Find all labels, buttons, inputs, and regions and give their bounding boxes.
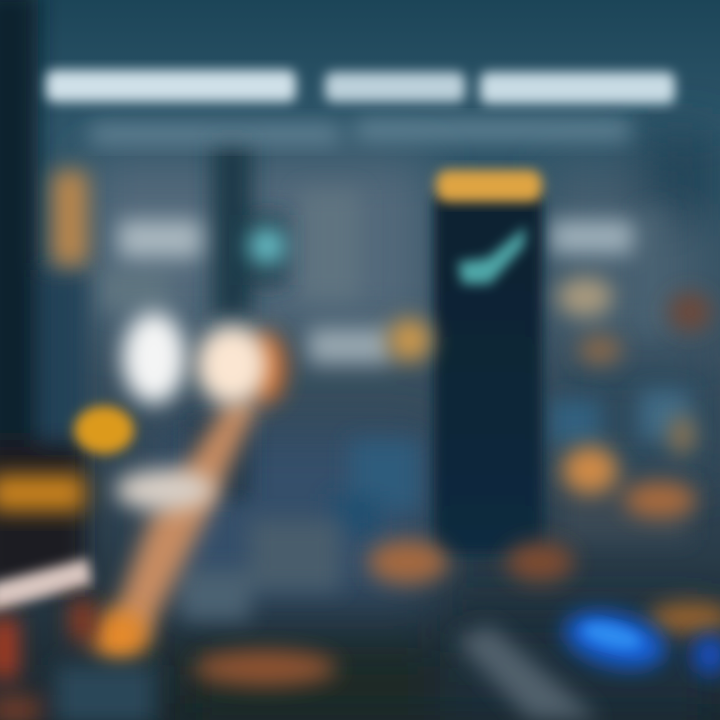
gold cap (436, 170, 542, 202)
white diagonal band (0, 558, 92, 612)
warm accent by label (388, 318, 432, 362)
subtitle (blurred, illegible) (90, 120, 630, 144)
peach blob (196, 325, 268, 405)
building texture (100, 190, 690, 620)
arm (104, 395, 258, 640)
hand figure (92, 312, 286, 662)
neon main (558, 602, 672, 678)
left dark column (0, 0, 85, 590)
blue neon (558, 602, 720, 678)
white sleeve (115, 469, 215, 511)
icon: teal check (458, 226, 526, 284)
yellow dot (74, 406, 134, 454)
orange sign (0, 474, 85, 512)
central dark tower (212, 140, 286, 320)
tan vertical bar (52, 170, 88, 266)
orange edge (246, 332, 286, 404)
orange fingertip (92, 610, 148, 662)
neon core (580, 618, 644, 654)
icon: teal dot (248, 227, 286, 265)
right side warm lights (193, 277, 720, 686)
title (blurred, illegible) (46, 70, 675, 104)
red lower left (0, 600, 155, 720)
white blob (122, 312, 186, 404)
skyline haze (90, 130, 720, 720)
tower body (434, 192, 542, 554)
label blocks (118, 220, 634, 364)
road highlight (455, 625, 600, 720)
neon right (692, 635, 720, 675)
dark tower with gold cap (434, 170, 542, 554)
